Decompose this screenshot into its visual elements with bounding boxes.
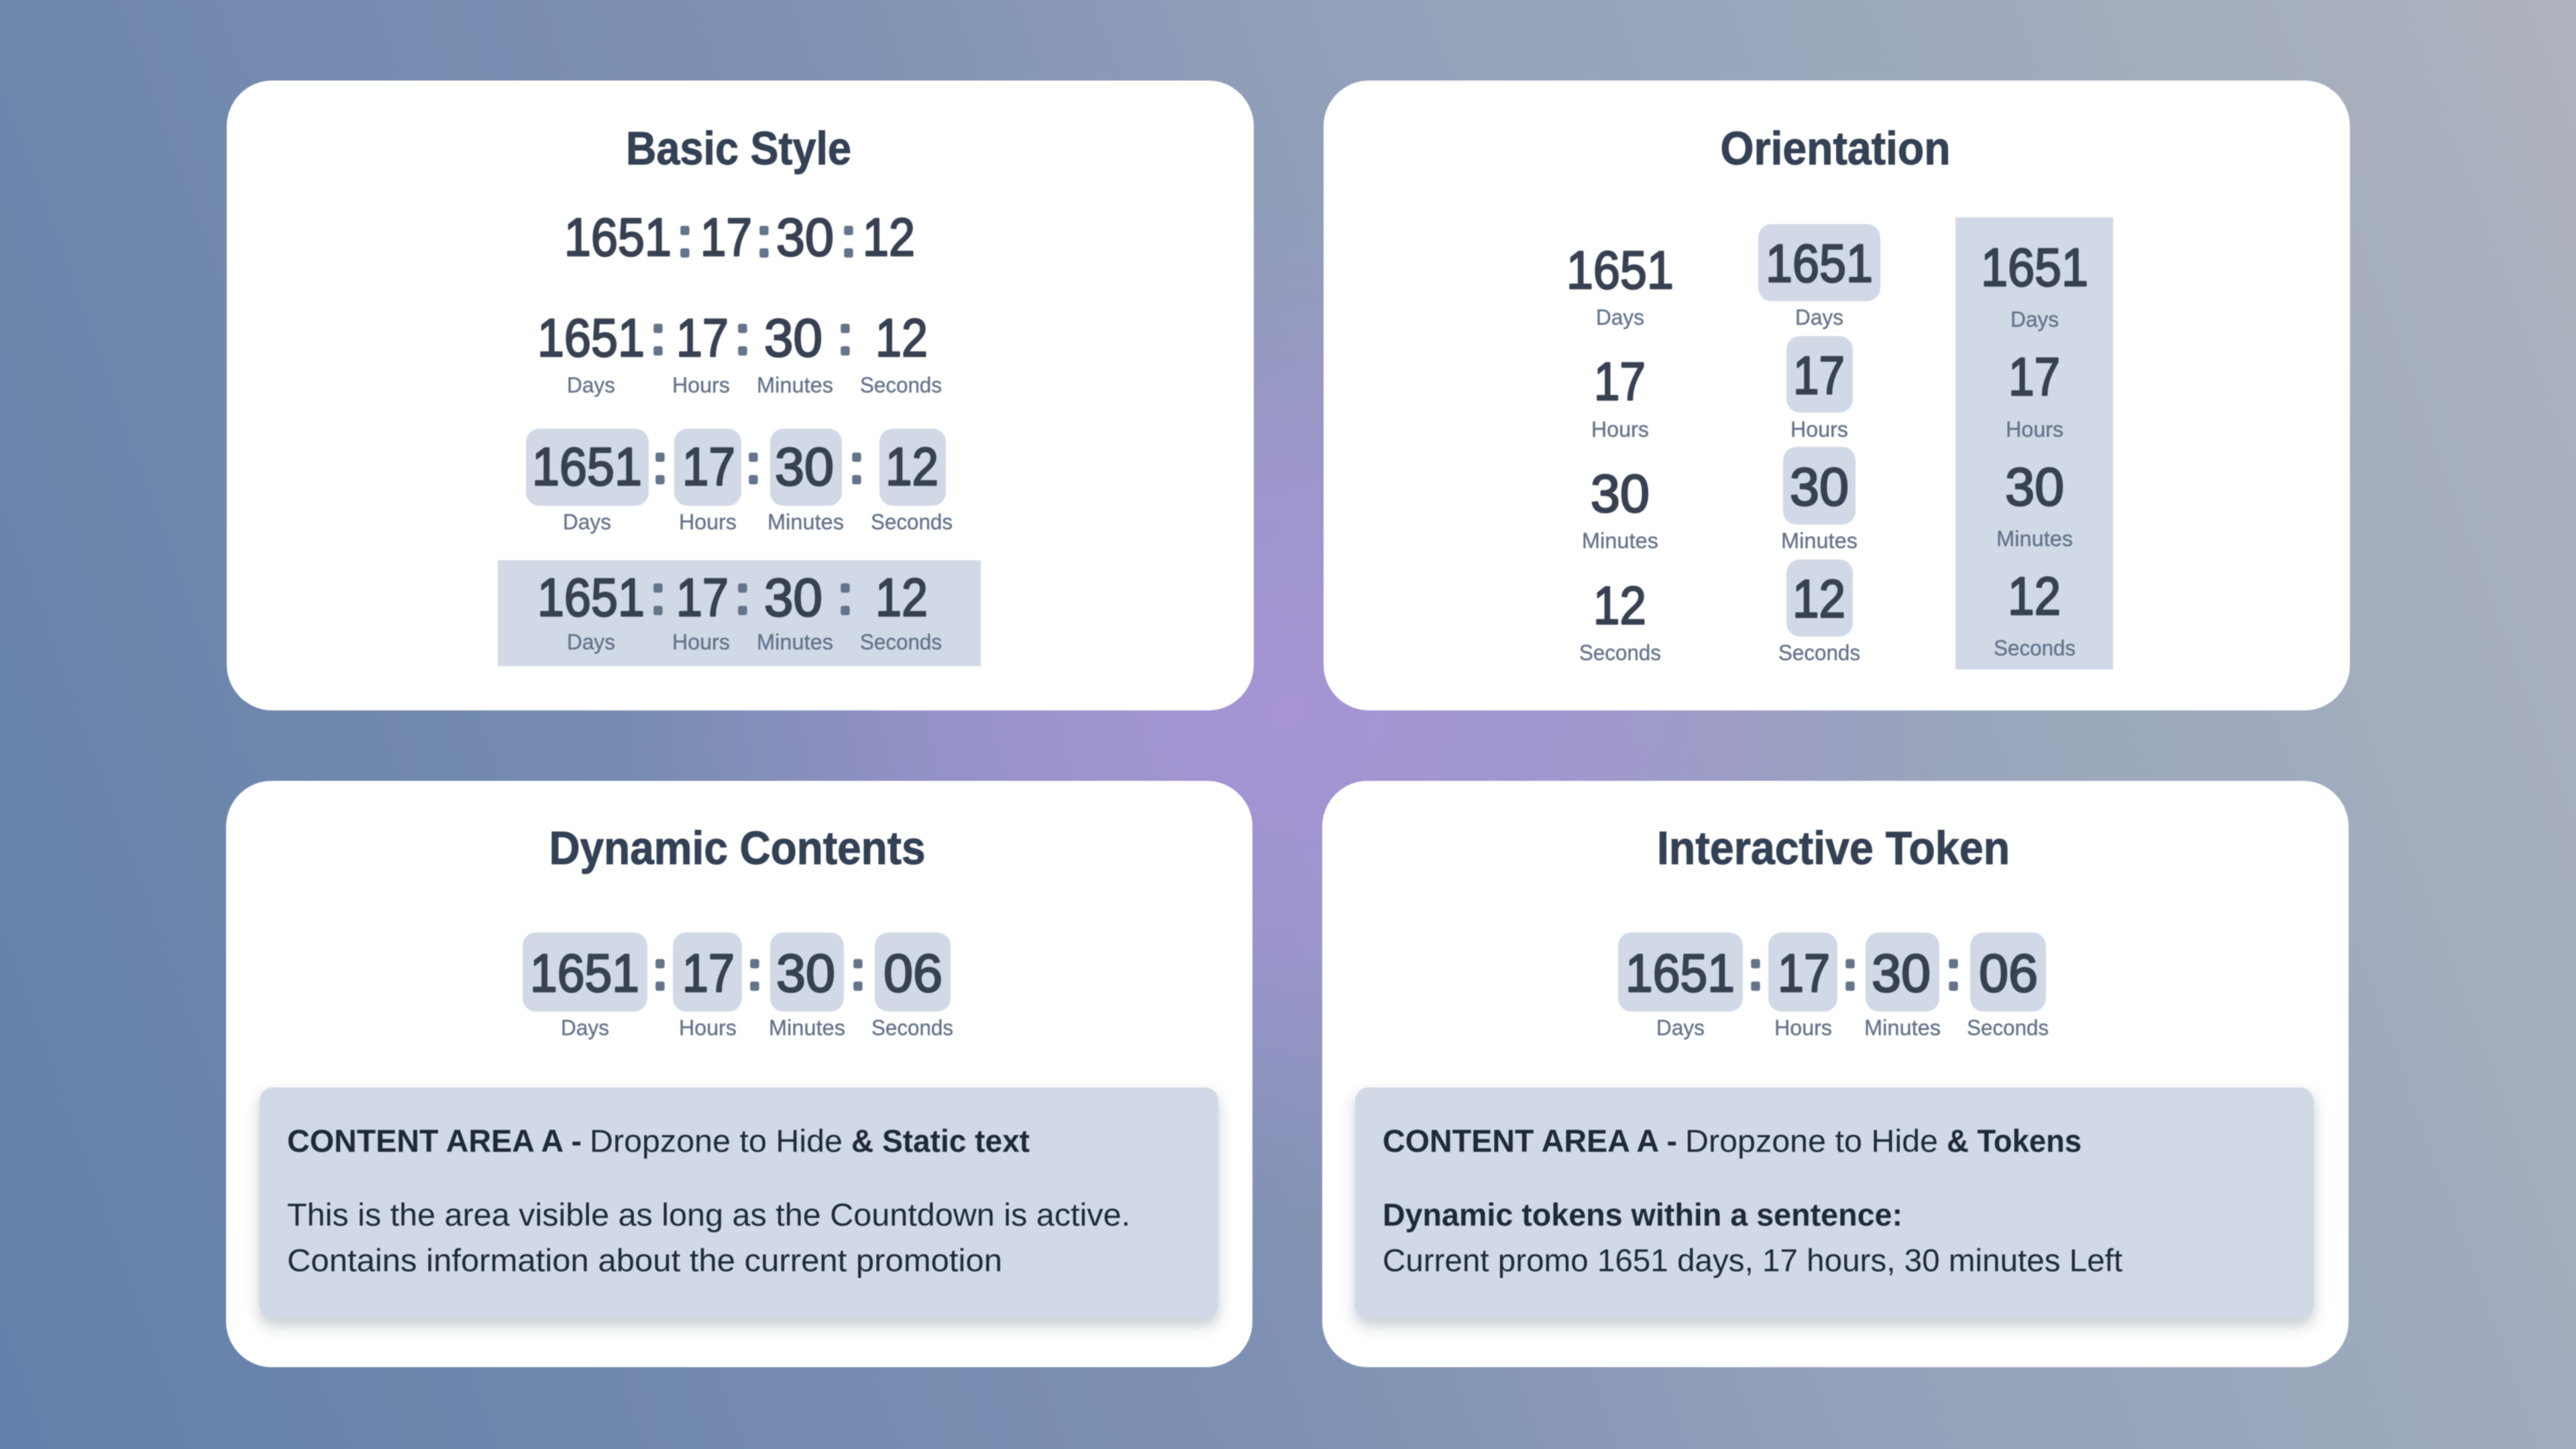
countdown: vertical tiles: 1651 [1766,233,1873,293]
countdown: plain inline: 12 [863,207,915,267]
countdown: vertical tiles: 30 [1790,457,1849,517]
countdown: dynamic tiles [523,932,953,1040]
countdown: dynamic tiles: 06 [883,943,943,1003]
content area box: tokens: CONTENT AREA A - [1383,1123,1677,1159]
countdown: token tiles: : [1946,941,1961,1000]
countdown: with labels: : [838,306,853,365]
countdown: token tiles: Seconds [1967,1016,2049,1040]
countdown: vertical plain: Minutes [1582,529,1658,553]
countdown: vertical full background: 12 [2008,566,2061,626]
countdown: with labels: : [651,306,665,365]
countdown: tiles with labels: Seconds [871,510,953,534]
countdown: dynamic tiles: Hours [679,1016,737,1040]
countdown: token tiles: 30 [1872,943,1931,1003]
content area box: tokens: Dynamic tokens within a sentence: [1383,1197,1902,1232]
countdown: vertical tiles [1758,224,1880,665]
countdown: tiles with labels: : [653,435,667,494]
countdown: tiles with labels: : [849,435,864,494]
countdown: tiles with labels: 30 [775,437,834,496]
countdown: dynamic tiles: : [653,941,667,1000]
countdown: full background band: Days [567,630,615,654]
countdown: full background band: : [838,566,853,625]
countdown: tiles with labels: 12 [885,437,938,496]
content area box: tokens [1355,1087,2314,1319]
countdown: token tiles: : [1748,941,1763,1000]
countdown: token tiles: 17 [1778,943,1830,1003]
countdown: vertical plain: 17 [1594,352,1646,411]
countdown: vertical tiles: Minutes [1781,529,1858,553]
content area box: tokens: & Tokens [1947,1123,2082,1159]
countdown: plain inline: 17 [700,207,752,267]
panel: interactive token [1322,781,2349,1367]
countdown: dynamic tiles: 1651 [530,943,639,1003]
countdown: dynamic tiles: 30 [776,943,835,1003]
countdown: tiles with labels: Days [563,510,611,534]
content area box: static text: This is the area visible as long as the Countdown is active. [287,1197,1130,1232]
countdown: with labels: 12 [875,308,928,368]
countdown: vertical full background: Hours [2006,417,2063,441]
countdown: plain inline: : [678,208,692,267]
heading: interactive token: Interactive Token [1657,822,2010,874]
countdown: vertical tiles: 12 [1792,569,1845,629]
countdown: vertical full background: Seconds [1994,636,2076,660]
countdown: token tiles: Minutes [1864,1016,1941,1040]
heading: orientation: Orientation [1720,122,1951,174]
countdown: vertical full background: 17 [2008,347,2060,407]
countdown: vertical plain: 30 [1591,464,1650,523]
countdown: with labels: 1651 [537,308,645,368]
countdown: full background band: Minutes [757,630,833,654]
countdown: with labels: 17 [676,308,729,368]
content area box: static text: Contains information about the current promotion [287,1242,1002,1278]
countdown: dynamic tiles: : [747,941,762,1000]
countdown: with labels: Days [567,373,615,397]
countdown: plain inline: 30 [776,207,834,267]
panel: orientation [1324,80,2350,710]
panel: dynamic contents [226,781,1252,1367]
countdown: plain inline: : [841,208,856,267]
countdown: vertical full background: 1651 [1981,237,2088,297]
countdown: dynamic tiles: Seconds [871,1016,953,1040]
countdown: vertical tiles: Days [1795,305,1843,329]
countdown: full background band: : [735,566,750,625]
countdown: vertical plain: 12 [1593,576,1646,635]
countdown: tiles with labels: Minutes [767,510,844,534]
countdown: dynamic tiles: : [851,941,865,1000]
countdown: dynamic tiles: 17 [682,943,735,1003]
countdown: full background band: 1651 [537,568,645,627]
countdown: tiles with labels: 17 [682,437,735,496]
countdown: with labels: Hours [672,373,730,397]
content area box: static text: Dropzone to Hide [590,1123,843,1159]
countdown: full background band: Hours [672,630,730,654]
countdown: full background band: : [651,566,665,625]
countdown: plain inline: : [757,208,771,267]
countdown: tiles with labels: 1651 [532,437,642,496]
countdown: vertical plain [1566,240,1674,665]
countdown: token tiles: Hours [1774,1016,1832,1040]
heading: basic style: Basic Style [626,122,851,174]
countdown: full background band [498,560,981,666]
countdown: token tiles: 06 [1979,943,2038,1003]
countdown: tiles with labels: Hours [679,510,737,534]
countdown: token tiles: Days [1656,1016,1705,1040]
countdown: vertical tiles: Hours [1790,417,1848,441]
countdown: vertical full background: Days [2010,307,2059,331]
panel: basic style [227,80,1254,710]
content area box: static text: CONTENT AREA A - [287,1123,582,1159]
content area box: tokens: Current promo 1651 days, 17 hours, 30 minutes Left [1383,1242,2123,1278]
content area box: static text [260,1087,1218,1319]
countdown: vertical plain: Hours [1591,417,1649,441]
countdown: with labels: Minutes [757,373,833,397]
countdown: vertical full background [1955,217,2113,669]
countdown: dynamic tiles: Minutes [769,1016,845,1040]
countdown: vertical tiles: 17 [1793,345,1845,405]
countdown: vertical full background: 30 [2005,457,2064,517]
countdown: plain inline: 1651 [564,207,672,267]
content area box: static text: & Static text [851,1123,1030,1159]
countdown: vertical tiles: Seconds [1778,641,1860,665]
countdown: vertical plain: Seconds [1579,641,1661,665]
content area box: tokens: Dropzone to Hide [1685,1123,1938,1159]
countdown: vertical plain: 1651 [1566,240,1674,300]
countdown: vertical plain: Days [1596,305,1644,329]
countdown: with labels: 30 [764,308,822,368]
countdown: full background band: Seconds [860,630,942,654]
countdown: plain inline [564,207,915,267]
heading: dynamic contents: Dynamic Contents [549,822,926,874]
countdown: with labels [537,306,942,397]
countdown: dynamic tiles: Days [561,1016,609,1040]
countdown: with labels: Seconds [860,373,942,397]
countdown: token tiles [1618,932,2049,1040]
countdown: tiles with labels [526,429,953,534]
countdown: vertical full background: Minutes [1996,527,2073,551]
countdown: tiles with labels: : [746,435,761,494]
countdown: token tiles: : [1843,941,1858,1000]
countdown: full background band: 30 [764,568,822,627]
countdown: with labels: : [735,306,750,365]
countdown: token tiles: 1651 [1625,943,1735,1003]
countdown: full background band: 12 [875,568,928,627]
countdown: full background band: 17 [676,568,729,627]
